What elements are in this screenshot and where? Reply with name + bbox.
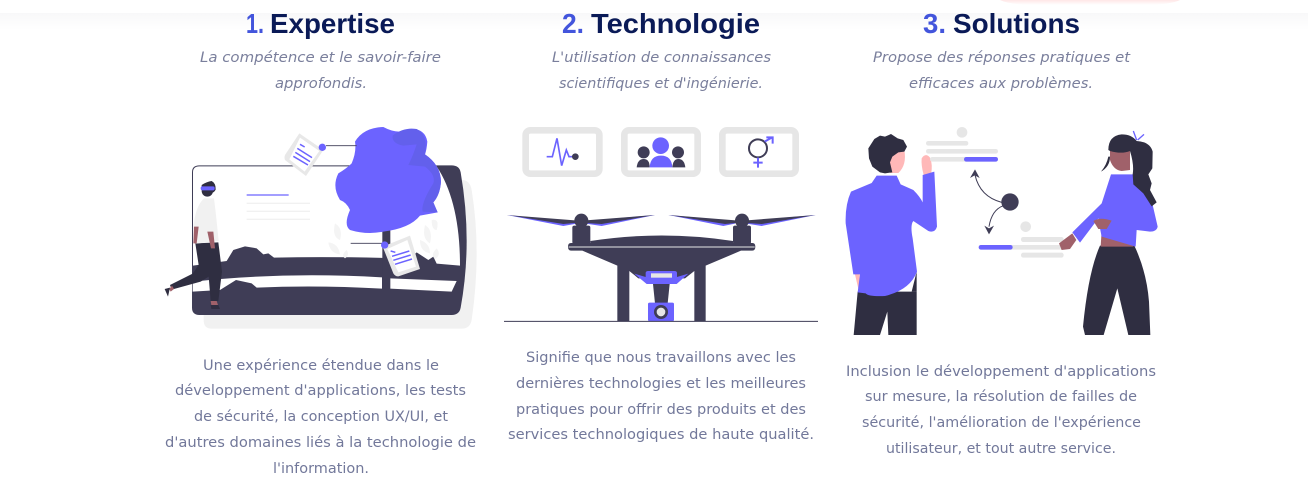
drone <box>507 214 816 321</box>
chart row: lower <box>979 221 1064 258</box>
arrows and central node <box>970 169 1019 234</box>
body text: technologie: dernières technologies et les meilleures <box>516 376 806 392</box>
chart row: upper <box>926 127 998 162</box>
panel: technologie <box>504 8 818 443</box>
body text: technologie: pratiques pour offrir des produits et des <box>516 402 806 418</box>
body text: solutions: Inclusion le développement d'applications <box>846 364 1156 380</box>
subtitle: solutions: Propose des réponses pratiques et <box>873 50 1131 66</box>
subtitle: technologie <box>552 50 771 92</box>
body text: solutions: sur mesure, la résolution de failles de <box>865 389 1137 405</box>
body text: solutions <box>846 364 1156 457</box>
illustration: drone and monitors <box>504 130 818 321</box>
icon: group of people <box>624 130 698 174</box>
icon: gender symbol <box>722 130 796 174</box>
subtitle: technologie: L'utilisation de connaissances <box>552 50 771 66</box>
panel: expertise <box>165 8 477 477</box>
body text: technologie: Signifie que nous travaillons avec les <box>526 350 796 366</box>
heading: 2. Technologie: 2. <box>562 8 584 39</box>
heading: 3. Solutions: 3. <box>923 8 946 39</box>
body text: expertise: développement d'applications, les tests <box>175 383 466 399</box>
figure: woman <box>1059 131 1158 335</box>
illustration: two people at a chart <box>846 127 1158 335</box>
subtitle: solutions <box>873 50 1131 92</box>
top bar shadow <box>0 0 1308 30</box>
illustration: person walking with tree screen <box>165 127 477 329</box>
body text: expertise <box>165 358 476 477</box>
icon: lower note <box>381 236 420 276</box>
heading: 2. Technologie: Technologie <box>591 8 760 39</box>
panel: solutions <box>846 8 1158 457</box>
figure: walking person <box>165 181 222 309</box>
heading: 1. Expertise: Expertise <box>270 8 395 39</box>
subtitle: expertise: La compétence et le savoir-faire <box>200 50 441 66</box>
subtitle: solutions: efficaces aux problèmes. <box>909 76 1093 92</box>
subtitle: technologie: scientifiques et d'ingénierie. <box>559 76 763 92</box>
body text: expertise: l'information. <box>273 461 369 477</box>
body text: technologie <box>508 350 814 443</box>
body text: expertise: d'autres domaines liés à la technologie de <box>165 435 476 451</box>
body text: expertise: de sécurité, la conception UX/UI, et <box>194 409 449 425</box>
body text: expertise: Une expérience étendue dans le <box>203 358 439 374</box>
body text: solutions: sécurité, l'amélioration de l'expérience <box>862 415 1141 431</box>
icon: heartbeat monitor <box>526 130 599 174</box>
figure: man <box>846 134 937 335</box>
subtitle: expertise: approfondis. <box>275 76 367 92</box>
subtitle: expertise <box>200 50 441 92</box>
heading: 1. Expertise: 1. <box>246 8 264 39</box>
body text: solutions: utilisateur, et tout autre service. <box>886 441 1116 457</box>
icon: upper note <box>284 133 326 176</box>
body text: technologie: services technologiques de haute qualité. <box>508 427 814 443</box>
heading: 3. Solutions: Solutions <box>953 8 1080 39</box>
